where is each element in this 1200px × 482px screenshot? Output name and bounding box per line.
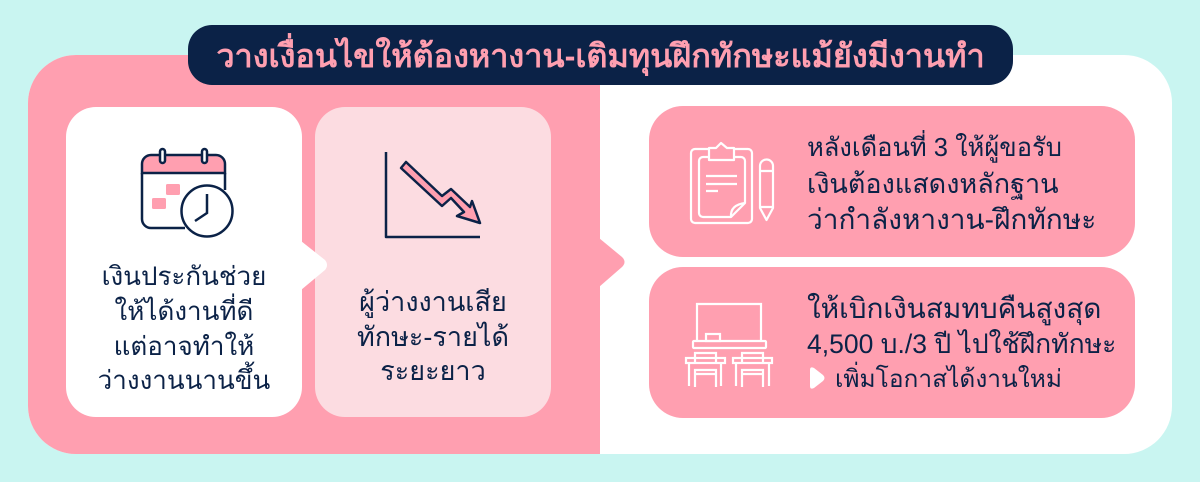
text: top right card: ว่ากำลังหางาน-ฝึกทักษะ [807,204,1096,235]
icon: small white play triangle [810,367,824,389]
text: left card: เงินประกันช่วย [102,261,266,291]
text: middle card [357,287,509,386]
text: bottom right card: เพิ่มโอกาสได้งานใหม่ [835,366,1062,393]
text: middle card: ผู้ว่างงานเสีย [359,287,507,317]
panel: white card [66,107,302,417]
text: left card [98,261,270,395]
icon: calendar with clock [142,149,232,236]
text: top right card: เงินต้องแสดงหลักฐาน [807,168,1059,198]
icon: clipboard and pencil [691,143,773,223]
icon: classroom board and desks [686,304,772,387]
panel: light pink card [315,107,551,417]
text: bottom right card [807,292,1116,393]
text: left card: ให้ได้งานที่ดี [115,296,253,326]
text: bottom right card: 4,500 บ./3 ปี ไปใช้ฝึกทักษะ [807,328,1116,358]
icon: falling chart [386,152,480,237]
panel: pink left half [28,55,600,454]
arrow: pink pointer into right half [599,238,624,287]
text: middle card: ทักษะ-รายได้ [357,322,509,352]
panel: main white card [28,55,1172,454]
text: middle card: ระยะยาว [380,356,486,386]
text: top right card: หลังเดือนที่ 3 ให้ผู้ขอรับ [807,134,1062,162]
text: top right card [807,130,1096,235]
arrow: white pointer over light card [301,241,327,290]
title: วางเงื่อนไขให้ต้องหางาน-เติมทุนฝึกทักษะแม้ยังมีงานทำ [216,38,985,74]
title bar [188,25,1013,85]
text: left card: ว่างงานนานขึ้น [98,365,270,395]
text: left card: แต่อาจทำให้ [114,331,254,361]
text: bottom right card: ให้เบิกเงินสมทบคืนสูงสุด [807,293,1102,324]
panel: top right card [649,106,1135,257]
panel: bottom right card [649,267,1135,418]
